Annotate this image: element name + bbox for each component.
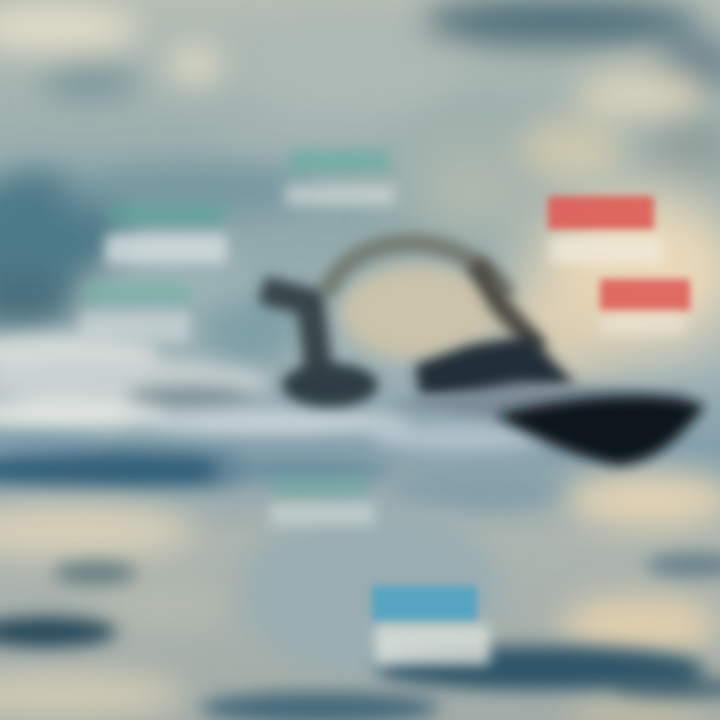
- boat: cabin right: [415, 335, 575, 398]
- boat: windshield glow: [340, 264, 500, 360]
- label: green heading top: [290, 150, 390, 172]
- boat: tower arch: [325, 243, 510, 295]
- label: text right 2: [600, 314, 685, 334]
- label: text bottom: [375, 625, 490, 665]
- label: green heading left 1: [110, 205, 225, 225]
- dark teal band: left side: [0, 164, 320, 370]
- boat: hull upper: [385, 382, 690, 422]
- boat: hull dark: [495, 396, 705, 465]
- warm glow: right side: [405, 163, 720, 380]
- label: text top: [285, 184, 395, 206]
- lower water: sandy reflections: [0, 472, 720, 720]
- label: blue heading bottom: [372, 586, 477, 622]
- boat: cabin left: [282, 363, 378, 407]
- boat: tower left post: [262, 290, 320, 380]
- boat: tower right post: [475, 262, 540, 350]
- label: green heading lower: [275, 476, 370, 498]
- label: text lower: [270, 502, 375, 526]
- waves: dark blue band: [0, 437, 570, 510]
- label: text left 1: [105, 234, 227, 264]
- label: text left 2: [80, 312, 190, 342]
- boat: [262, 243, 705, 465]
- label: text right 1: [550, 236, 662, 264]
- label: red heading right 1: [548, 196, 654, 230]
- waves: white foam: [0, 334, 550, 452]
- lower water: dark patches: [0, 553, 720, 720]
- clouds: upper sky: [0, 0, 720, 185]
- label: green heading left 2: [85, 284, 190, 304]
- label: red heading right 2: [600, 279, 690, 311]
